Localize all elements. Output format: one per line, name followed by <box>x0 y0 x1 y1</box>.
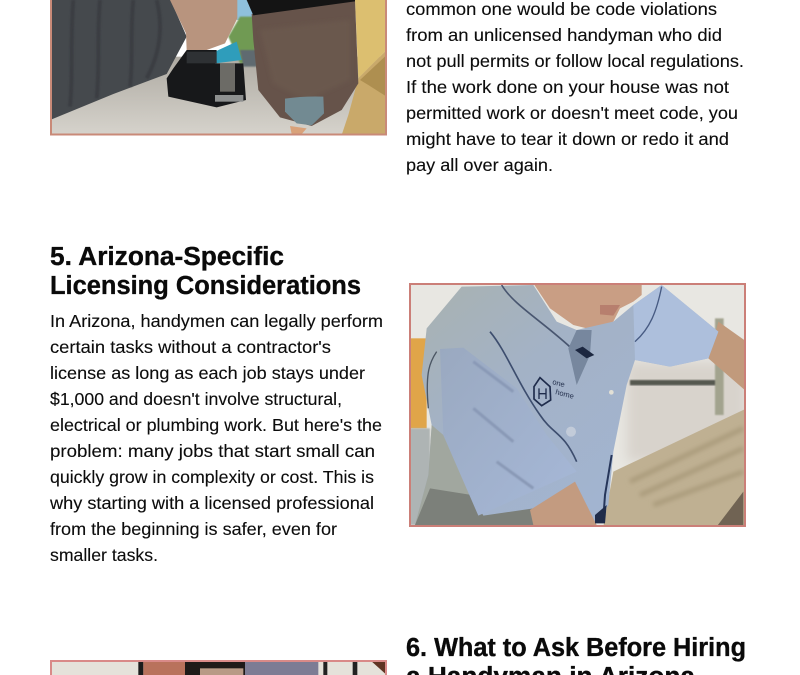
text block: Arizona licensing paragraph: electrical or plumbing work. But here's the <box>50 415 382 435</box>
photo: drill and shoe with frame <box>40 0 400 135</box>
logo mark on shirt <box>534 378 551 406</box>
shirt body <box>415 285 718 525</box>
heading: section 5 <box>50 243 361 300</box>
text block: code violations paragraph: permitted work or doesn't meet code, you <box>406 103 738 123</box>
text block: Arizona licensing paragraph <box>49 311 383 565</box>
text block: Arizona licensing paragraph: license as long as each job stays under <box>50 363 365 383</box>
text block: Arizona licensing paragraph: smaller tasks. <box>50 545 158 565</box>
text block: code violations paragraph <box>406 0 744 175</box>
photo: cropped worker with cap with frame <box>50 660 387 675</box>
text block: code violations paragraph: If the work done on your house was not <box>406 77 729 97</box>
logo text on shirt: one <box>551 377 566 389</box>
heading: section 6 <box>406 634 746 675</box>
text block: code violations paragraph: might have to tear it down or redo it and <box>406 129 729 149</box>
text block: code violations paragraph: not pull permits or follow local regulations. <box>406 51 744 71</box>
text block: Arizona licensing paragraph: why starting with a licensed professional <box>49 493 374 513</box>
text block: code violations paragraph: pay all over again. <box>406 155 553 175</box>
heading: section 5: Licensing Considerations <box>50 272 361 300</box>
photo: technician in blue shirt with frame: home <box>554 387 575 401</box>
photo: technician in blue shirt with frame <box>410 283 747 527</box>
text block: Arizona licensing paragraph: from the beginning is safer, even for <box>50 519 337 539</box>
text block: Arizona licensing paragraph: problem: many jobs that start small can <box>50 441 375 461</box>
heading: section 6: 6. What to Ask Before Hiring <box>406 634 746 662</box>
heading: section 5: 5. Arizona-Specific <box>50 243 284 271</box>
text block: code violations paragraph: from an unlicensed handyman who did <box>406 25 722 45</box>
text block: Arizona licensing paragraph: certain tasks without a contractor's <box>50 337 331 357</box>
text block: Arizona licensing paragraph: quickly grow in complexity or cost. This is <box>50 467 374 487</box>
text block: Arizona licensing paragraph: In Arizona, handymen can legally perform <box>50 311 383 331</box>
text block: Arizona licensing paragraph: $1,000 and doesn't involve structural, <box>50 389 342 409</box>
